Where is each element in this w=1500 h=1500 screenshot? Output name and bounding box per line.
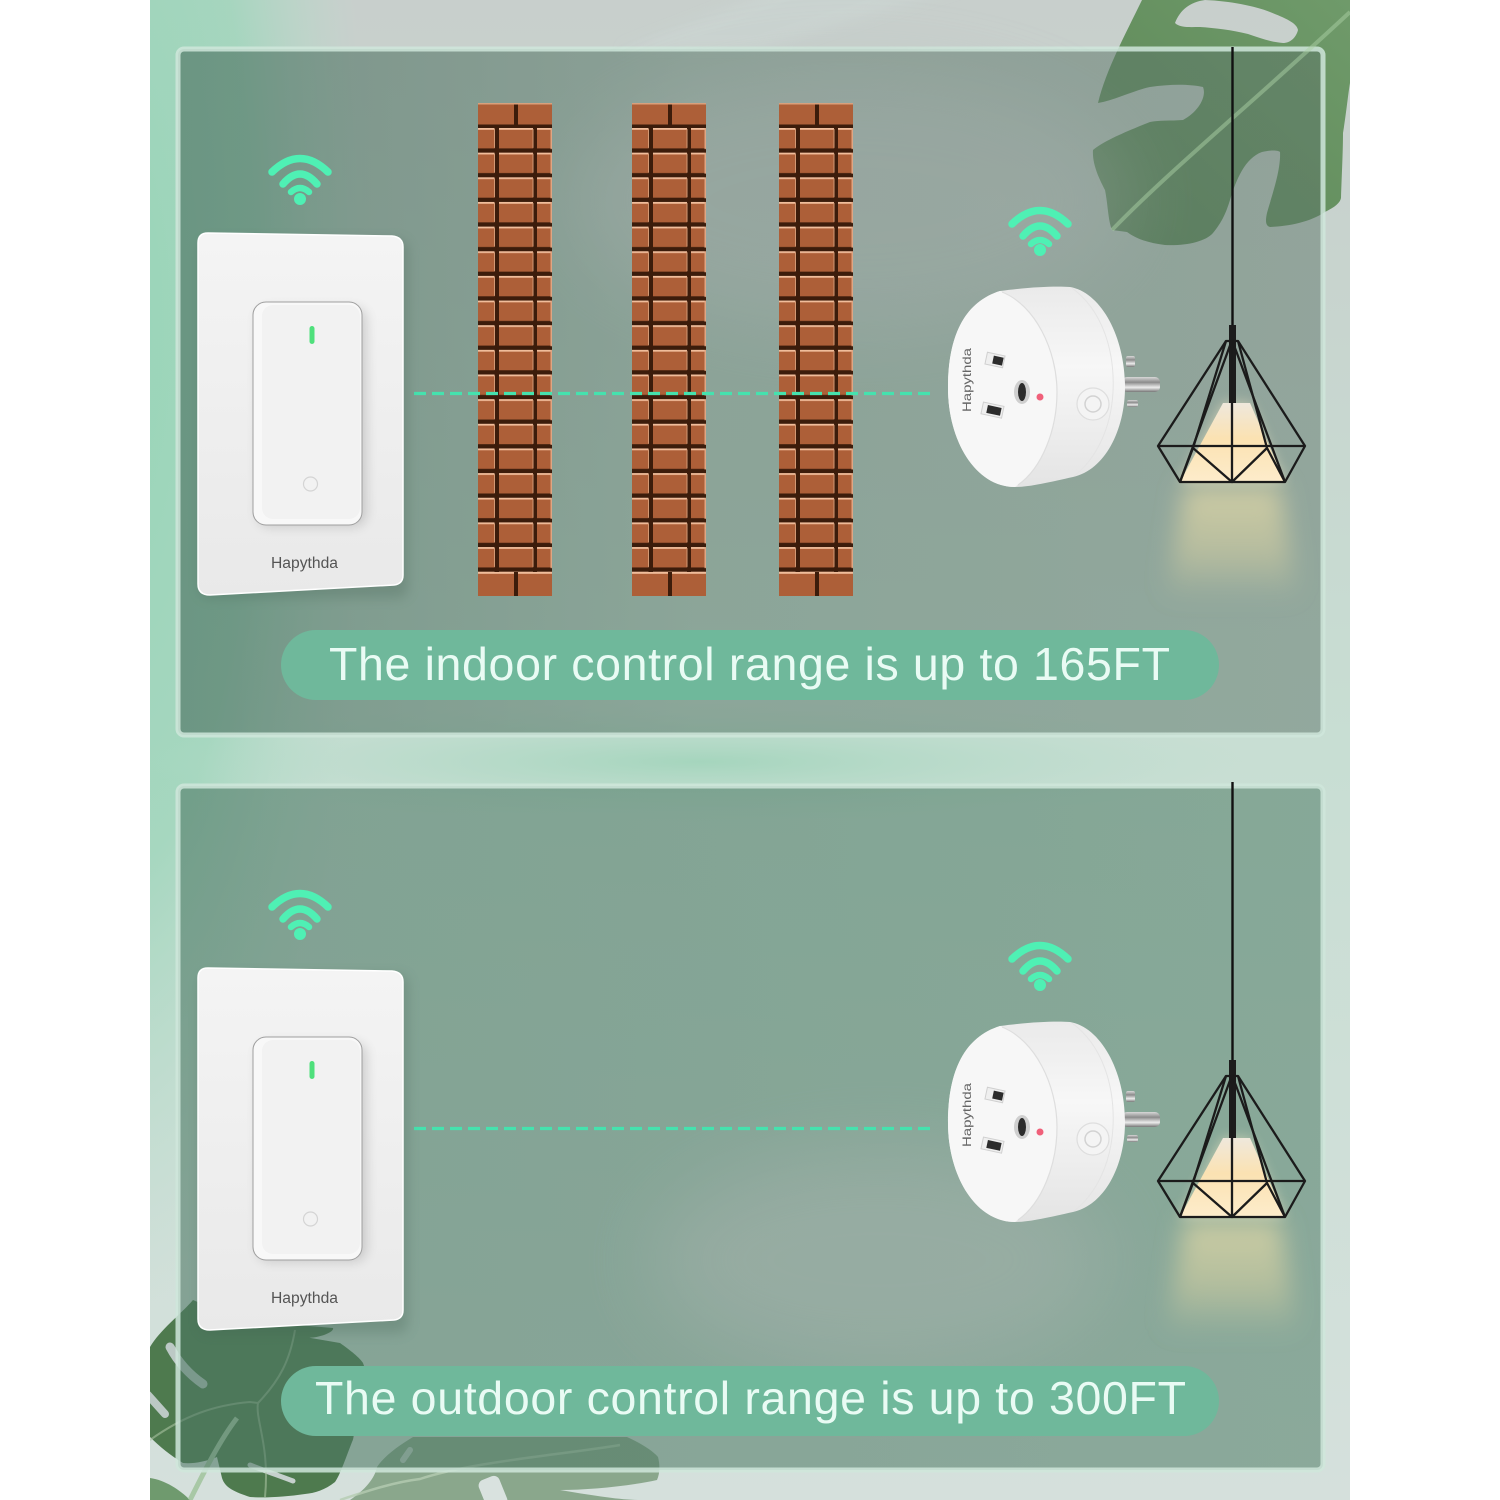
smart plug: indoor: [948, 287, 1160, 487]
panel lighting: [570, 70, 1130, 1370]
smart plug: indoor: Hapythda: [960, 348, 974, 412]
light beam: indoor: [1165, 486, 1298, 600]
leaf: bottom left monstera group: [148, 1300, 659, 1500]
light beam: outdoor: [1165, 1221, 1298, 1335]
leaf: top right monstera: [1093, 0, 1350, 245]
wall switch: outdoor: Hapythda: [271, 1290, 338, 1307]
caption pill: outdoor: [281, 1366, 1219, 1436]
wall switch: indoor: Hapythda: [271, 555, 338, 572]
signal line: indoor: [414, 392, 932, 395]
wifi icon: indoor plug: [1012, 210, 1068, 256]
caption pill: outdoor: The outdoor control range is up to 300FT: [315, 1372, 1186, 1424]
panel: indoor range: [178, 49, 1323, 735]
signal line: outdoor: [414, 1127, 932, 1130]
panel: outdoor range: [178, 786, 1323, 1470]
pendant lamp: indoor: [1158, 47, 1305, 482]
caption pill: indoor: [281, 630, 1219, 700]
smart plug: outdoor: [948, 1022, 1160, 1222]
wifi icon: outdoor switch: [272, 894, 328, 940]
caption pill: indoor: The indoor control range is up to 165FT: [329, 638, 1170, 690]
wifi icon: indoor switch: [272, 158, 328, 205]
brick walls: [478, 103, 853, 596]
leaf rib: top right: [1112, 12, 1350, 230]
wall switch: indoor: [198, 233, 408, 598]
wifi icon: outdoor plug: [1012, 946, 1068, 991]
pendant lamp: outdoor: [1158, 782, 1305, 1217]
wall switch: outdoor: [198, 968, 408, 1333]
background: [150, 0, 1350, 1500]
smart plug: outdoor: Hapythda: [960, 1083, 974, 1147]
